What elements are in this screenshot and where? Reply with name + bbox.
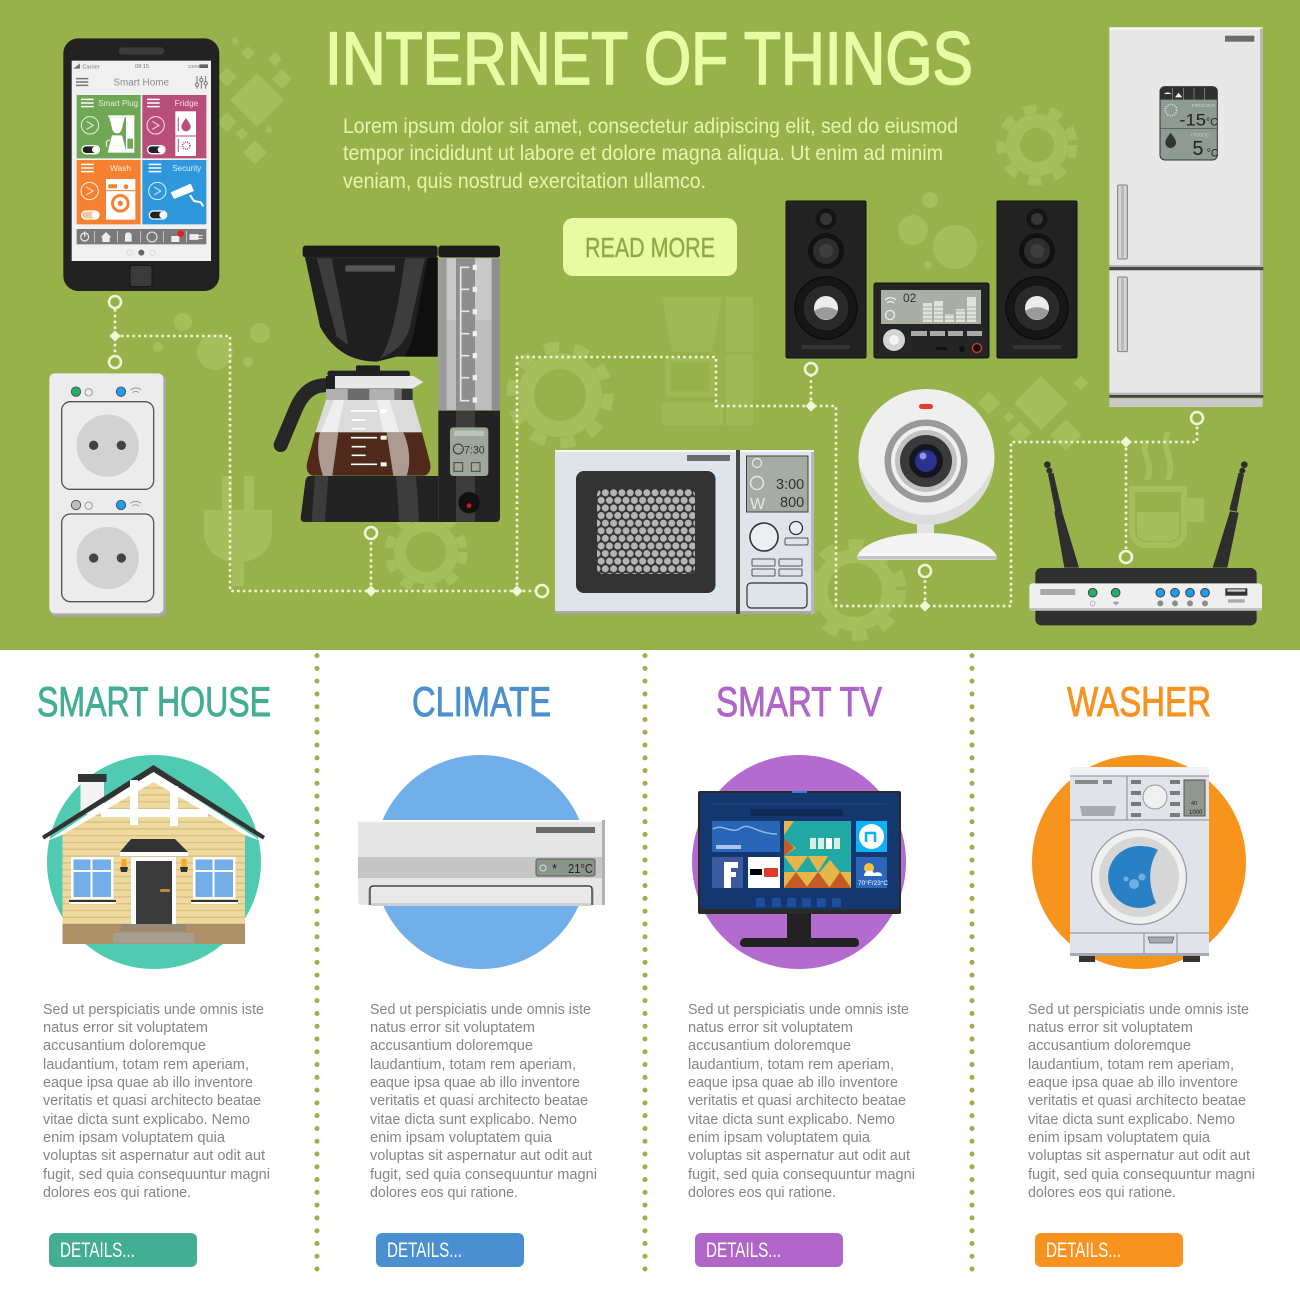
body text: fugit, sed quia consequuntur magni xyxy=(1028,1166,1255,1183)
body text: fugit, sed quia consequuntur magni xyxy=(43,1166,270,1183)
icon: smart fridge xyxy=(1109,27,1263,407)
icon: stereo amplifier: 02 xyxy=(903,291,917,305)
body text: fugit, sed quia consequuntur magni xyxy=(688,1166,915,1183)
icon: washing machine on orange circle: 1000 xyxy=(1189,810,1203,816)
body text: natus error sit voluptatem xyxy=(688,1019,853,1036)
body text xyxy=(1028,1001,1255,1201)
body text: dolores eos qui ratione. xyxy=(688,1184,836,1201)
details button xyxy=(1035,1233,1183,1267)
tile: fridge xyxy=(142,95,206,158)
fridge display xyxy=(1160,87,1219,160)
details button xyxy=(376,1233,524,1267)
details button: DETAILS... xyxy=(387,1239,462,1262)
details button xyxy=(695,1233,843,1267)
tile: fridge: Fridge xyxy=(175,98,199,108)
icon: smart tv on purple circle xyxy=(692,755,906,969)
body text: veritatis et quasi architecto beatae xyxy=(370,1092,588,1109)
body text: dolores eos qui ratione. xyxy=(43,1184,191,1201)
body text: natus error sit voluptatem xyxy=(43,1019,208,1036)
intro text: tempor incididunt ut labore et dolore magna aliqua. Ut enim ad minim xyxy=(343,142,943,165)
heading: climate: CLIMATE xyxy=(412,678,551,725)
panel: climate column xyxy=(358,678,605,1267)
body text: Sed ut perspiciatis unde omnis iste xyxy=(1028,1001,1249,1018)
details button xyxy=(49,1233,197,1267)
icon: stereo amplifier xyxy=(874,283,989,358)
body text: veritatis et quasi architecto beatae xyxy=(43,1092,261,1109)
title: INTERNET OF THINGS xyxy=(325,17,973,100)
tile: smart plug xyxy=(77,95,141,158)
body text: Sed ut perspiciatis unde omnis iste xyxy=(688,1001,909,1018)
fridge display: °C xyxy=(1206,116,1218,128)
heading: smart tv: SMART TV xyxy=(716,678,882,725)
body text xyxy=(43,1001,270,1201)
icon: air conditioner on blue circle xyxy=(358,755,605,969)
fridge display: 5 xyxy=(1192,138,1203,160)
icon: washing machine on orange circle xyxy=(1032,755,1246,969)
body text: accusantium doloremque xyxy=(370,1037,533,1054)
panel: green header background xyxy=(0,0,1300,650)
body text: voluptas sit aspernatur aut odit aut xyxy=(43,1147,266,1164)
body text: Sed ut perspiciatis unde omnis iste xyxy=(43,1001,264,1018)
body text: dolores eos qui ratione. xyxy=(1028,1184,1176,1201)
tile: wash: Wash xyxy=(110,163,131,173)
body text: laudantium, totam rem aperiam, xyxy=(688,1056,894,1073)
panel: washer column xyxy=(1028,678,1255,1267)
body text: laudantium, totam rem aperiam, xyxy=(1028,1056,1234,1073)
tile: security: Security xyxy=(172,163,202,173)
fridge display: FRIDGE xyxy=(1191,132,1210,138)
body text: veritatis et quasi architecto beatae xyxy=(688,1092,906,1109)
read more button: READ MORE xyxy=(585,232,715,263)
intro text: veniam, quis nostrud exercitation ullamco. xyxy=(343,170,706,193)
icon: washing machine on orange circle: 40 xyxy=(1191,801,1197,807)
body text: natus error sit voluptatem xyxy=(1028,1019,1193,1036)
app bottom toolbar xyxy=(77,229,206,244)
body text: eaque ipsa quae ab illo inventore xyxy=(1028,1074,1238,1091)
body text: voluptas sit aspernatur aut odit aut xyxy=(370,1147,593,1164)
tile: security xyxy=(142,160,206,224)
background decoration: faint shapes xyxy=(153,37,1204,636)
heading: smart house: SMART HOUSE xyxy=(37,678,271,725)
tile: smart plug: Smart Plug xyxy=(98,98,138,108)
body text: vitae dicta sunt explicabo. Nemo xyxy=(370,1111,577,1128)
body text: fugit, sed quia consequuntur magni xyxy=(370,1166,597,1183)
heading: washer: WASHER xyxy=(1067,678,1211,725)
icon: stereo right speaker xyxy=(997,201,1077,358)
body text: accusantium doloremque xyxy=(1028,1037,1191,1054)
body text: eaque ipsa quae ab illo inventore xyxy=(370,1074,580,1091)
body text: voluptas sit aspernatur aut odit aut xyxy=(1028,1147,1251,1164)
icon: microwave oven: W xyxy=(750,496,766,513)
body text: natus error sit voluptatem xyxy=(370,1019,535,1036)
icon: microwave oven xyxy=(555,450,814,614)
panel: white lower section xyxy=(0,650,1300,1300)
icon: house on teal circle xyxy=(42,755,265,969)
body text: vitae dicta sunt explicabo. Nemo xyxy=(1028,1111,1235,1128)
icon: coffee maker xyxy=(281,246,500,522)
body text: veritatis et quasi architecto beatae xyxy=(1028,1092,1246,1109)
tile: wash xyxy=(77,160,141,224)
body text: Sed ut perspiciatis unde omnis iste xyxy=(370,1001,591,1018)
icon: coffee maker: 7:30 xyxy=(464,444,485,456)
icon: web camera xyxy=(857,389,997,560)
body text: enim ipsam voluptatem quia xyxy=(370,1129,553,1146)
fridge display: -15 xyxy=(1179,110,1206,129)
body text: laudantium, totam rem aperiam, xyxy=(43,1056,249,1073)
icon: air conditioner on blue circle: 21°C xyxy=(568,861,593,876)
dotted column dividers xyxy=(317,656,972,1272)
body text xyxy=(370,1001,597,1201)
icon: smartphone with smart home app: Smart Home xyxy=(113,78,169,89)
panel: smart house column xyxy=(37,678,271,1267)
icon: smart tv on purple circle: 70°F/23°C xyxy=(858,879,888,887)
body text: enim ipsam voluptatem quia xyxy=(1028,1129,1211,1146)
body text: eaque ipsa quae ab illo inventore xyxy=(688,1074,898,1091)
icon: stereo left speaker xyxy=(786,201,866,358)
body text: enim ipsam voluptatem quia xyxy=(688,1129,871,1146)
body text: accusantium doloremque xyxy=(688,1037,851,1054)
panel: smart tv column xyxy=(688,678,915,1267)
body text: vitae dicta sunt explicabo. Nemo xyxy=(688,1111,895,1128)
icon: microwave oven: 800 xyxy=(780,495,804,511)
intro text: Lorem ipsum dolor sit amet, consectetur adipiscing elit, sed do eiusmod xyxy=(343,115,958,138)
details button: DETAILS... xyxy=(706,1239,781,1262)
read more button xyxy=(563,218,737,276)
body text: eaque ipsa quae ab illo inventore xyxy=(43,1074,253,1091)
body text xyxy=(688,1001,915,1201)
icon: smartphone with smart home app: 100% xyxy=(188,64,201,70)
icon: wifi router xyxy=(1029,461,1262,625)
intro text xyxy=(343,115,958,193)
body text: vitae dicta sunt explicabo. Nemo xyxy=(43,1111,250,1128)
body text: accusantium doloremque xyxy=(43,1037,206,1054)
connector lines xyxy=(109,296,1203,612)
body text: laudantium, totam rem aperiam, xyxy=(370,1056,576,1073)
fridge display: FREEZER xyxy=(1192,103,1215,109)
icon: smart wall sockets xyxy=(49,373,166,617)
body text: voluptas sit aspernatur aut odit aut xyxy=(688,1147,911,1164)
details button: DETAILS... xyxy=(60,1239,135,1262)
icon: air conditioner on blue circle: * xyxy=(552,861,557,876)
body text: enim ipsam voluptatem quia xyxy=(43,1129,226,1146)
body text: dolores eos qui ratione. xyxy=(370,1184,518,1201)
icon: smartphone with smart home app: Carrier xyxy=(82,65,100,71)
fridge display: °C xyxy=(1207,148,1219,160)
icon: smartphone with smart home app xyxy=(63,38,219,291)
icon: microwave oven: 3:00 xyxy=(776,477,804,493)
icon: smartphone with smart home app: 08:15 xyxy=(135,64,149,70)
details button: DETAILS... xyxy=(1046,1239,1121,1262)
